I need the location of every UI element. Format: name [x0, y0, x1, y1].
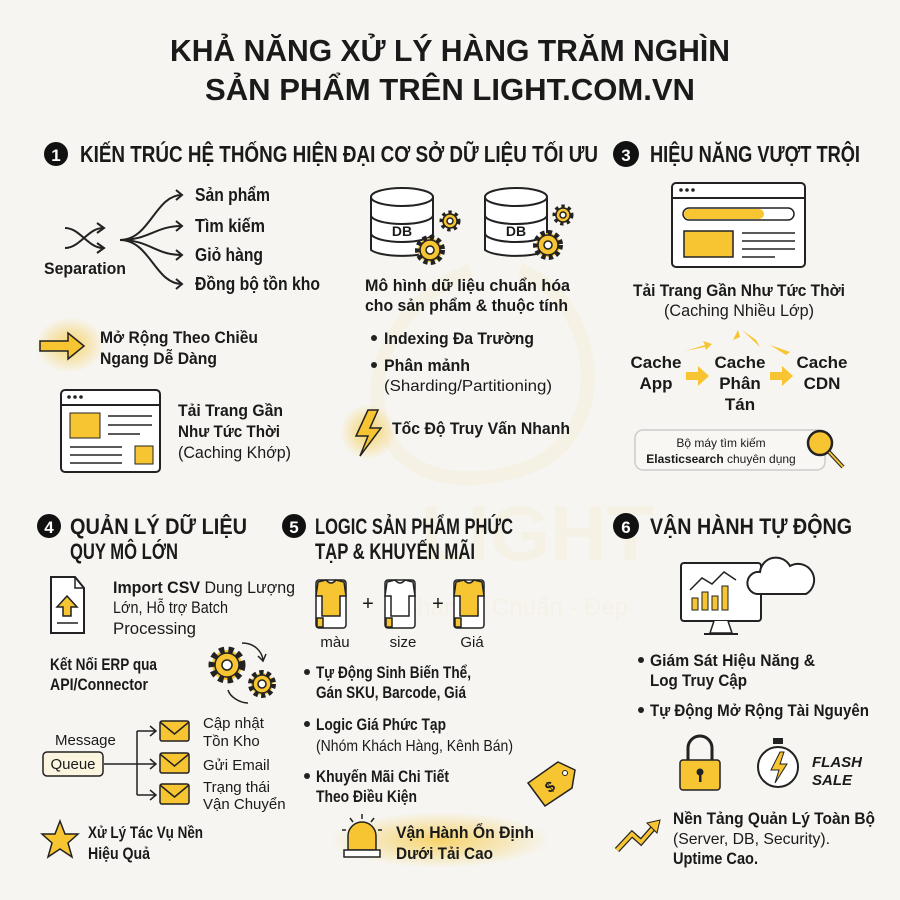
background tasks: Hiệu Quả	[88, 844, 150, 863]
fast query	[340, 404, 570, 460]
title: KHẢ NĂNG XỬ LÝ HÀNG TRĂM NGHÌN	[170, 32, 730, 68]
database icons: DB	[506, 223, 526, 239]
data model text: Mô hình dữ liệu chuẩn hóa	[365, 276, 571, 295]
product logic bullets: (Nhóm Khách Hàng, Kênh Bán)	[316, 738, 513, 755]
product logic bullets: Theo Điều Kiện	[316, 787, 417, 806]
price tag: $	[542, 778, 559, 797]
automation bullets	[638, 651, 869, 720]
separation diagram	[44, 185, 320, 294]
background tasks: Xử Lý Tác Vụ Nền	[88, 823, 203, 842]
heading 6: VẬN HÀNH TỰ ĐỘNG	[650, 514, 852, 539]
instant load text	[633, 281, 845, 320]
title: SẢN PHẨM TRÊN LIGHT.COM.VN	[205, 71, 695, 107]
automation bullets: Tự Động Mở Rộng Tài Nguyên	[650, 701, 869, 720]
csv import: Processing	[113, 619, 196, 638]
elasticsearch box: Elasticsearch chuyên dụng	[646, 452, 796, 466]
shirts: +	[362, 593, 374, 615]
stable ops: Vận Hành Ổn Định	[396, 823, 534, 842]
monitor and cloud	[681, 558, 814, 634]
lock	[680, 736, 720, 790]
shirts: Giá	[460, 634, 484, 651]
watermark: LIGHT	[420, 489, 654, 577]
product logic bullets	[304, 663, 513, 806]
cache chain: Phân	[719, 374, 761, 393]
watermark	[377, 270, 654, 621]
flash sale stopwatch	[758, 738, 863, 789]
shirts	[316, 580, 484, 651]
product logic bullets: Logic Giá Phức Tạp	[316, 715, 446, 734]
message queue: Gửi Email	[203, 757, 270, 774]
heading 3: 3	[621, 146, 631, 165]
stable ops	[330, 812, 550, 868]
browser caching	[61, 390, 291, 472]
instant load text: Tải Trang Gần Như Tức Thời	[633, 281, 845, 300]
heading 1: KIẾN TRÚC HỆ THỐNG HIỆN ĐẠI CƠ SỞ DỮ LIỆU TỐI ƯU	[80, 139, 598, 167]
heading 1: 1	[51, 146, 61, 165]
browser loading	[672, 183, 805, 267]
stable ops: Dưới Tải Cao	[396, 844, 493, 863]
message queue: Tồn Kho	[203, 733, 260, 750]
database icons: DB	[392, 223, 412, 239]
platform management: (Server, DB, Security).	[673, 831, 830, 848]
automation bullets: Log Truy Cập	[650, 671, 747, 690]
platform management	[617, 809, 875, 868]
csv import: Import CSV Dung Lượng	[113, 578, 295, 597]
instant load text: (Caching Nhiều Lớp)	[664, 301, 814, 320]
separation diagram: Giỏ hàng	[195, 245, 263, 265]
browser caching: Tải Trang Gần	[178, 401, 283, 420]
platform management: Nền Tảng Quản Lý Toàn Bộ	[673, 809, 875, 828]
flash sale stopwatch: FLASH	[812, 754, 863, 771]
heading 4: QUẢN LÝ DỮ LIỆU	[70, 514, 247, 539]
product logic bullets: Gán SKU, Barcode, Giá	[316, 683, 466, 702]
cache chain: Tán	[725, 395, 755, 414]
heading 4: 4	[44, 518, 54, 537]
horizontal scaling: Mở Rộng Theo Chiều	[100, 328, 258, 347]
erp connector	[50, 643, 273, 703]
heading 5: LOGIC SẢN PHẨM PHỨC	[315, 514, 513, 539]
database icons	[371, 188, 571, 262]
message queue: Cập nhật	[203, 715, 265, 732]
heading 5	[282, 514, 513, 564]
title	[170, 32, 730, 107]
browser caching: Như Tức Thời	[178, 422, 280, 441]
heading 5: 5	[289, 518, 299, 537]
fast query: Tốc Độ Truy Vấn Nhanh	[392, 419, 570, 438]
horizontal scaling	[35, 317, 258, 373]
erp connector: Kết Nối ERP qua	[50, 655, 157, 674]
automation bullets: Giám Sát Hiệu Năng &	[650, 651, 815, 670]
browser caching: (Caching Khớp)	[178, 443, 291, 462]
product logic bullets: Tự Động Sinh Biến Thể,	[316, 663, 471, 682]
data model text: Indexing Đa Trường	[384, 329, 534, 348]
background tasks	[42, 821, 203, 863]
separation diagram: Tìm kiếm	[195, 216, 265, 236]
data model text: Phân mảnh	[384, 356, 470, 375]
cache chain: Cache	[630, 353, 682, 372]
heading 4: QUY MÔ LỚN	[70, 539, 178, 564]
shirts: màu	[320, 634, 350, 651]
message queue: Message	[55, 732, 116, 749]
heading 5: TẠP & KHUYẾN MÃI	[315, 539, 475, 564]
horizontal scaling: Ngang Dễ Dàng	[100, 349, 217, 368]
separation diagram: Đồng bộ tồn kho	[195, 274, 320, 294]
elasticsearch box: Bộ máy tìm kiếm	[676, 436, 766, 450]
platform management: Uptime Cao.	[673, 849, 758, 868]
separation diagram: Separation	[44, 259, 126, 278]
data model text: (Sharding/Partitioning)	[384, 378, 552, 395]
price tag	[528, 762, 575, 806]
heading 6: 6	[621, 518, 631, 537]
separation diagram: Sản phẩm	[195, 185, 270, 205]
heading 4	[37, 514, 247, 564]
elasticsearch box	[635, 430, 843, 470]
message queue: Queue	[50, 756, 96, 773]
message queue: Trạng thái	[203, 779, 270, 796]
cache chain	[630, 330, 848, 414]
cache chain: App	[639, 374, 673, 393]
data model text	[365, 276, 571, 395]
csv import: Lớn, Hỗ trợ Batch	[113, 598, 228, 617]
cache chain: CDN	[804, 374, 840, 393]
shirts: +	[432, 593, 444, 615]
product logic bullets: Khuyến Mãi Chi Tiết	[316, 767, 449, 786]
message queue	[43, 715, 286, 813]
cache chain: Cache	[714, 353, 766, 372]
erp connector: API/Connector	[50, 675, 148, 694]
watermark: Nhanh - Chuẩn - Đẹp	[400, 594, 628, 621]
message queue: Vận Chuyển	[203, 796, 286, 813]
shirts: size	[390, 634, 416, 651]
cache chain: Cache	[796, 353, 848, 372]
data model text: cho sản phẩm & thuộc tính	[365, 296, 568, 315]
flash sale stopwatch: SALE	[812, 772, 853, 789]
csv import	[51, 577, 295, 638]
